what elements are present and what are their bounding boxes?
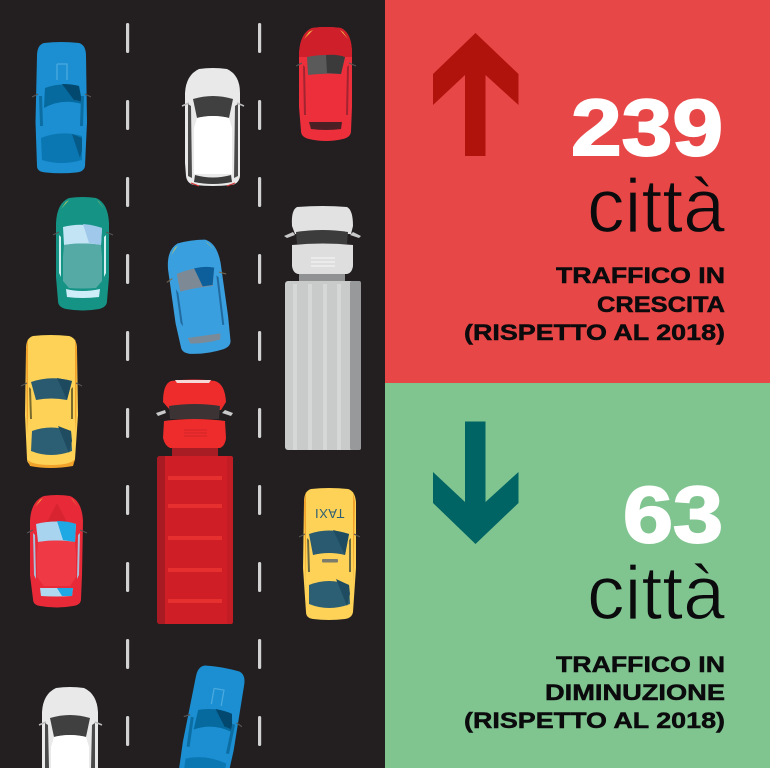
icon: up arrow: [433, 33, 518, 156]
label: città: città: [587, 551, 726, 636]
car: blue sedan: [32, 42, 91, 173]
taxi label: TAXI: [315, 506, 344, 521]
car: blue sedan tilted bottom: [171, 662, 251, 768]
text: traffico in crescita: CRESCITA: [597, 292, 725, 317]
car: taxi: [299, 488, 360, 620]
text: traffico in crescita: TRAFFICO IN: [556, 263, 725, 288]
text: traffico in diminuzione: DIMINUZIONE: [545, 680, 725, 705]
text: traffico in diminuzione: (RISPETTO AL 2018): [464, 708, 725, 733]
car: blue hatchback tilted: [161, 236, 237, 357]
label: città: città: [587, 164, 726, 249]
car: white hatchback: [182, 68, 244, 186]
truck: red: [156, 380, 233, 624]
number: 239: 239: [571, 83, 723, 172]
text: traffico in diminuzione: TRAFFICO IN: [556, 652, 725, 677]
icon: down arrow: [433, 422, 518, 544]
number: 63: 63: [623, 470, 723, 559]
text: traffico in crescita: [464, 263, 725, 345]
panel: road: [0, 0, 385, 768]
car: white hatchback bottom: [39, 687, 102, 768]
car: yellow sedan: [21, 335, 82, 468]
text: traffico in diminuzione: [464, 652, 725, 733]
car: red sedan: [27, 495, 87, 608]
car: red hatchback: [296, 27, 356, 141]
truck: white: [284, 206, 361, 450]
text: traffico in crescita: (RISPETTO AL 2018): [464, 320, 725, 345]
car: teal sedan: [53, 197, 113, 310]
panel: traffic increasing: [385, 0, 770, 383]
panel: traffic decreasing: [385, 383, 770, 768]
